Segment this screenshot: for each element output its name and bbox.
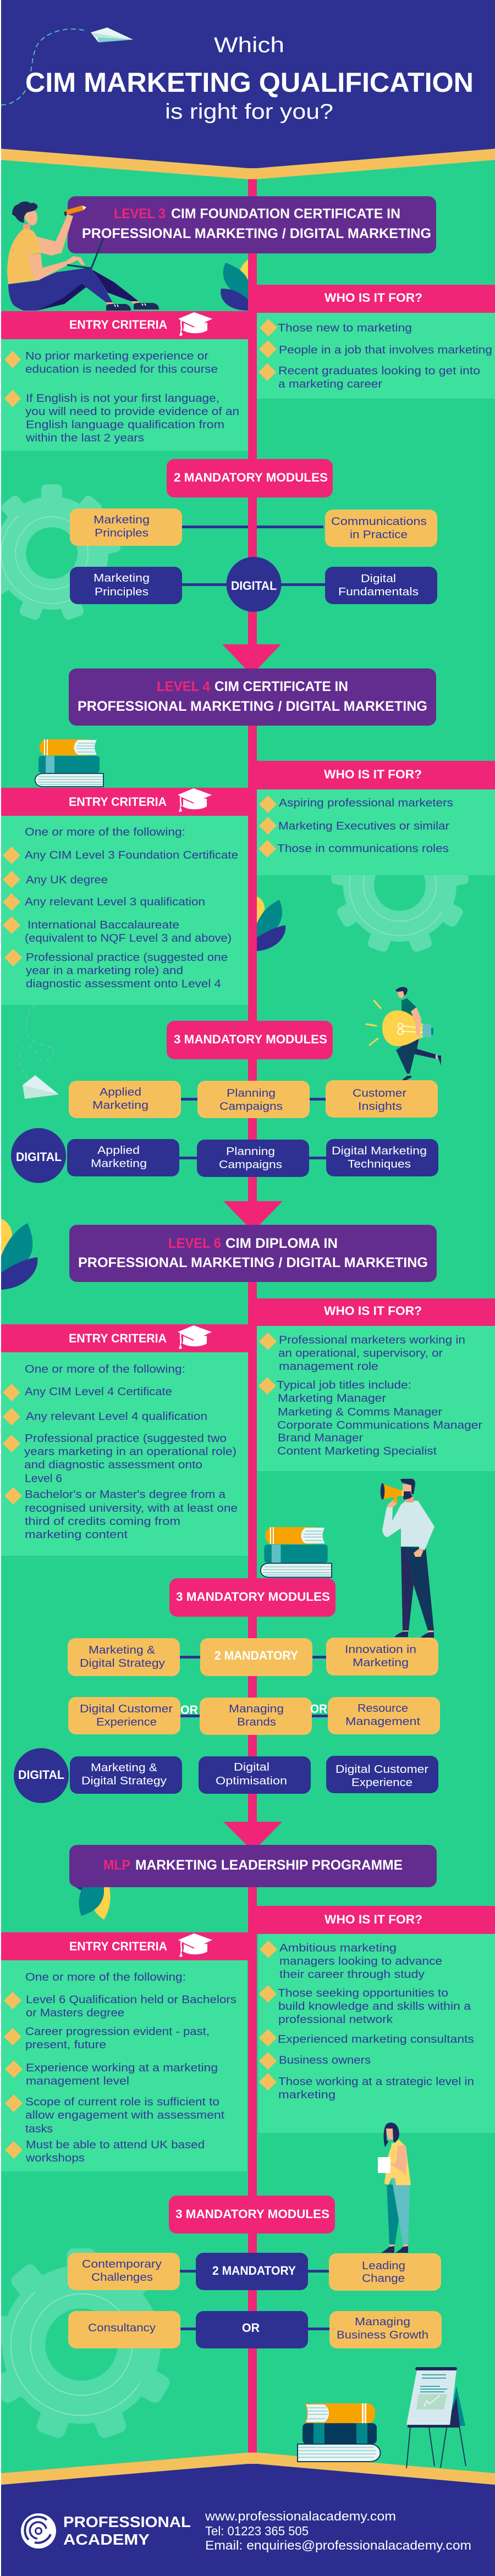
panel: entry criteria: Professional practice (suggested two (25, 1433, 227, 1445)
contact details: Email: enquiries@professionalacademy.com (205, 2538, 471, 2552)
digital module: Marketing Principles (70, 567, 182, 604)
panel: who is it for: Those in communications roles (277, 843, 449, 855)
digital oval: DIGITAL (18, 1768, 64, 1782)
panel: entry criteria: English language qualification from (26, 419, 224, 431)
module: Contemporary Challenges (68, 2253, 180, 2290)
panel: entry criteria: recognised university, with at least one (25, 1502, 238, 1514)
digital module: Digital Customer Experience: Experience (351, 1777, 413, 1789)
section: marketing leadership programme (1, 1845, 495, 2348)
icon: books (298, 2403, 381, 2462)
panel: entry criteria: or Masters degree (26, 2007, 124, 2019)
panel: entry criteria: allow engagement with assessment (25, 2109, 224, 2121)
entry criteria banner: ENTRY CRITERIA (69, 1331, 167, 1345)
module: Planning Campaigns: Planning (227, 1087, 276, 1099)
icon: flip chart (406, 2367, 466, 2468)
module: Leading Change (329, 2253, 441, 2291)
panel: who is it for: Experienced marketing consultants (278, 2033, 474, 2046)
panel: entry criteria: you will need to provide evidence of an (25, 406, 239, 418)
panel: who is it for: Brand Manager (278, 1432, 363, 1444)
digital oval: DIGITAL (231, 579, 277, 593)
panel: entry criteria: Career progression evident - past, (25, 2026, 210, 2038)
digital module: Digital Marketing Techniques: Digital Marketing (332, 1145, 427, 1157)
heading: level 4: LEVEL 4 (157, 679, 210, 694)
panel: who is it for: Content Marketing Specialist (277, 1445, 437, 1457)
module: Resource Management: Resource (358, 1702, 408, 1715)
section: level 4 (1, 668, 495, 1225)
or label left: OR (180, 1703, 198, 1717)
digital oval: DIGITAL (16, 1150, 62, 1164)
digital module: Planning Campaigns: Campaigns (219, 1159, 282, 1171)
contact details (205, 2509, 471, 2552)
panel: entry criteria (1, 339, 248, 451)
heading: level 3: LEVEL 3 (114, 206, 166, 222)
module: Contemporary Challenges: Challenges (91, 2271, 153, 2284)
panel: entry criteria: Any CIM Level 4 Certificate (25, 1386, 172, 1398)
modules heading: 3 MANDATORY MODULES (174, 1032, 327, 1046)
digital module: Marketing & Digital Strategy: Marketing & (91, 1762, 158, 1774)
heading: level 3: CIM FOUNDATION CERTIFICATE IN (171, 206, 400, 222)
module: Applied Marketing (69, 1081, 181, 1118)
dashed flight path (19, 1005, 54, 1079)
logo mark (21, 2513, 56, 2549)
digital module: Digital Marketing Techniques (326, 1139, 438, 1176)
digital oval (227, 557, 282, 612)
module: Innovation in Marketing: Marketing (353, 1657, 409, 1669)
panel: entry criteria: tasks (25, 2123, 53, 2135)
module: Marketing Principles (70, 508, 182, 546)
panel: who is it for: build knowledge and skills within a (278, 2000, 471, 2013)
illustration: man carrying light bulb (366, 987, 441, 1080)
heading: level 6: CIM DIPLOMA IN (226, 1236, 338, 1251)
panel: entry criteria: Any CIM Level 3 Foundation Certificate (25, 849, 238, 861)
section: level 6 (1, 1219, 495, 1845)
icon: leaves (221, 259, 248, 311)
who is it for banner (248, 761, 495, 789)
module: 2 mandatory: 2 MANDATORY (215, 1649, 298, 1662)
digital oval (14, 1748, 69, 1803)
module connectors (179, 526, 329, 2330)
modules heading (167, 1021, 333, 1059)
digital module: Applied Marketing: Applied (97, 1145, 140, 1157)
module: Innovation in Marketing: Innovation in (345, 1644, 416, 1656)
panel: entry criteria: If English is not your first language, (26, 393, 219, 405)
arrow (222, 644, 281, 668)
digital module: Digital Fundamentals: Digital (361, 573, 396, 585)
panel: entry criteria: Any relevant Level 4 qualification (26, 1411, 207, 1423)
module: Planning Campaigns: Campaigns (219, 1101, 283, 1113)
contact details: www.professionalacademy.com (205, 2509, 396, 2523)
module: Managing Business Growth: Business Growth (337, 2329, 428, 2341)
panel: entry criteria: No prior marketing experience or (25, 350, 208, 362)
footer banner (1, 2367, 495, 2576)
digital module: Digital Optimisation (199, 1756, 311, 1794)
panel: who is it for: Professional marketers working in (279, 1334, 465, 1346)
logo wordmark: PROFESSIONAL (63, 2513, 191, 2530)
panel: entry criteria: Bachelor's or Master's degree from a (25, 1489, 226, 1501)
module: 2 mandatory (200, 1638, 312, 1676)
arrow (223, 1201, 283, 1225)
panel: entry criteria: management level (26, 2075, 129, 2087)
logo wordmark (63, 2513, 191, 2548)
module: Managing Brands: Brands (237, 1716, 276, 1728)
panel: who is it for: Typical job titles include: (277, 1379, 411, 1391)
panel: who is it for: a marketing career (278, 378, 382, 390)
module: Resource Management (328, 1697, 440, 1734)
logo: professional academy (21, 2513, 191, 2549)
heading: MLP: MLP (103, 1858, 130, 1873)
heading: level 4: PROFESSIONAL MARKETING / DIGITAL MARKETING (78, 699, 427, 714)
module: Digital Customer Experience (68, 1697, 180, 1734)
panel: entry criteria: Level 6 (25, 1473, 62, 1485)
digital module: Digital Fundamentals (325, 567, 437, 604)
icon: paper plane (91, 27, 133, 42)
heading: level 6 (69, 1225, 437, 1282)
heading: level 3: PROFESSIONAL MARKETING / DIGITAL MARKETING (82, 226, 431, 241)
arrow (223, 1822, 282, 1845)
panel: entry criteria (1, 1960, 247, 2171)
panel: entry criteria: education is needed for this course (25, 363, 218, 375)
heading: level 6: LEVEL 6 (168, 1236, 221, 1251)
entry criteria banner (1, 1324, 257, 1352)
module: Applied Marketing: Marketing (92, 1099, 148, 1112)
digital module: Digital Optimisation: Optimisation (216, 1775, 287, 1787)
panel: who is it for: Business owners (279, 2054, 371, 2066)
contact details: Tel: 01223 365 505 (205, 2524, 309, 2538)
heading: MLP: MARKETING LEADERSHIP PROGRAMME (135, 1858, 403, 1873)
heading: level 4 (69, 668, 436, 726)
panel: entry criteria (1, 1352, 248, 1556)
digital module: Digital Customer Experience (326, 1756, 438, 1793)
entry criteria banner: ENTRY CRITERIA (69, 795, 167, 809)
digital module: Marketing & Digital Strategy (70, 1756, 182, 1794)
digital module: Digital Fundamentals: Fundamentals (338, 586, 419, 598)
heading: MLP (69, 1845, 437, 1887)
digital module: Marketing & Digital Strategy: Digital Strategy (81, 1775, 167, 1787)
module: Marketing Principles: Principles (95, 527, 148, 539)
panel: who is it for (258, 1934, 495, 2133)
panel: who is it for (257, 313, 495, 399)
panel: entry criteria: and diagnostic assessment onto (24, 1459, 202, 1471)
title: Which (214, 34, 284, 57)
panel: who is it for: marketing (278, 2089, 336, 2101)
illustration: man with laptop (7, 201, 159, 311)
digital module: Digital Customer Experience: Digital Customer (336, 1764, 428, 1776)
panel: who is it for: Recent graduates looking to get into (278, 365, 480, 377)
panel: entry criteria: International Baccalaureate (28, 919, 179, 931)
module: Applied Marketing: Applied (100, 1086, 141, 1098)
dashed flight path (1, 29, 86, 105)
module: or (196, 2311, 308, 2348)
module: Communications in Practice: Communications (331, 516, 427, 528)
panel: entry criteria (1, 816, 248, 1005)
panel: entry criteria: within the last 2 years (25, 432, 144, 444)
panel: entry criteria: Any relevant Level 3 qualification (25, 896, 205, 908)
heading: level 6: PROFESSIONAL MARKETING / DIGITAL MARKETING (78, 1255, 428, 1270)
entry criteria banner (1, 1932, 257, 1960)
digital module: Planning Campaigns: Planning (226, 1146, 275, 1158)
background gears (0, 484, 469, 2440)
panel: who is it for: People in a job that involves marketing (279, 344, 492, 356)
heading: level 3 (68, 196, 436, 253)
module: Consultancy (68, 2311, 180, 2348)
module: or: OR (242, 2321, 260, 2335)
left page edge (0, 0, 1, 2576)
digital module: Planning Campaigns (197, 1140, 309, 1177)
entry criteria banner (1, 788, 257, 816)
panel: entry criteria: years marketing in an operational role) (24, 1446, 237, 1458)
who is it for banner (257, 285, 495, 313)
modules heading (169, 1578, 336, 1617)
modules heading: 2 MANDATORY MODULES (174, 471, 328, 484)
icon: books (35, 739, 103, 787)
panel: who is it for: Ambitious marketing (279, 1942, 397, 1954)
who is it for banner: WHO IS IT FOR? (324, 1304, 422, 1318)
central pink timeline (248, 179, 257, 2455)
panel: entry criteria: workshops (25, 2152, 85, 2164)
module: Managing Brands: Managing (229, 1703, 284, 1715)
digital oval (11, 1128, 66, 1183)
module: Customer Insights (326, 1080, 438, 1118)
module: Marketing & Digital Strategy: Marketing & (89, 1644, 156, 1656)
panel: who is it for: an operational, supervisory, or (278, 1347, 443, 1359)
module: 2 mandatory (196, 2253, 308, 2290)
module: Leading Change: Change (362, 2273, 405, 2285)
modules heading (169, 2196, 335, 2234)
panel: entry criteria: Must be able to attend UK based (26, 2139, 205, 2151)
module: Managing Business Growth (329, 2311, 442, 2348)
panel: who is it for: professional network (278, 2014, 393, 2026)
module: Resource Management: Management (345, 1716, 421, 1728)
module: Planning Campaigns (197, 1081, 310, 1118)
title: CIM MARKETING QUALIFICATION (25, 67, 474, 98)
panel: who is it for: Marketing Executives or similar (278, 820, 449, 832)
panel: who is it for: management role (279, 1361, 378, 1373)
who is it for banner (248, 1906, 495, 1934)
panel: who is it for: Those seeking opportunities to (278, 1987, 448, 1999)
who is it for banner: WHO IS IT FOR? (324, 1912, 422, 1926)
panel: who is it for: Marketing Manager (278, 1392, 386, 1405)
entry criteria banner: ENTRY CRITERIA (69, 1939, 167, 1953)
panel: entry criteria: year in a marketing role) and (26, 965, 183, 977)
module: Communications in Practice (325, 510, 437, 547)
panel: who is it for (257, 1326, 495, 1471)
panel: who is it for (257, 789, 495, 875)
who is it for banner (248, 1298, 495, 1326)
panel: entry criteria: One or more of the following: (25, 826, 185, 838)
modules heading: 3 MANDATORY MODULES (176, 1590, 330, 1604)
entry criteria banner: ENTRY CRITERIA (69, 318, 167, 331)
panel: entry criteria: Experience working at a marketing (26, 2062, 218, 2074)
module: Contemporary Challenges: Contemporary (82, 2258, 162, 2270)
panel: entry criteria: marketing content (25, 1529, 128, 1541)
header banner (1, 0, 495, 179)
panel: entry criteria: (equivalent to NQF Level 3 and above) (25, 932, 232, 944)
heading: level 4: CIM CERTIFICATE IN (215, 679, 348, 694)
module: Digital Customer Experience: Digital Customer (80, 1703, 173, 1715)
panel: who is it for: Corporate Communications Manager (277, 1419, 482, 1431)
panel: entry criteria: One or more of the following: (25, 1363, 185, 1375)
module: Marketing Principles: Marketing (94, 514, 150, 526)
module: Customer Insights: Customer (353, 1087, 406, 1099)
panel: entry criteria: Scope of current role is sufficient to (25, 2096, 219, 2108)
icon: leaves (74, 1886, 111, 1920)
module: Innovation in Marketing (326, 1638, 438, 1676)
digital module: Digital Optimisation: Digital (234, 1761, 270, 1773)
icon: books (261, 1527, 332, 1577)
module: Marketing & Digital Strategy: Digital Strategy (80, 1657, 165, 1670)
panel: entry criteria: diagnostic assessment onto Level 4 (26, 978, 221, 990)
module: 2 mandatory: 2 MANDATORY (212, 2264, 296, 2278)
icon: leaves (1, 1219, 37, 1290)
logo wordmark: ACADEMY (63, 2531, 150, 2548)
digital module: Digital Marketing Techniques: Techniques (348, 1158, 411, 1170)
who is it for banner: WHO IS IT FOR? (324, 291, 422, 305)
module: Managing Brands (200, 1698, 312, 1735)
module: Digital Customer Experience: Experience (96, 1716, 157, 1728)
panel: who is it for: Marketing & Comms Manager (278, 1406, 442, 1418)
module: Marketing & Digital Strategy (68, 1638, 180, 1676)
panel: entry criteria: present, future (25, 2039, 106, 2051)
panel: entry criteria: One or more of the following: (25, 1971, 186, 1983)
panel: entry criteria: third of credits coming from (25, 1516, 180, 1528)
panel: entry criteria: Professional practice (suggested one (26, 952, 228, 964)
who is it for banner: WHO IS IT FOR? (324, 767, 422, 781)
title (25, 34, 474, 124)
module: Leading Change: Leading (362, 2260, 405, 2272)
title: is right for you? (165, 100, 333, 124)
module: Managing Business Growth: Managing (355, 2316, 410, 2328)
module: Consultancy: Consultancy (88, 2322, 156, 2334)
illustration: woman with tablet (378, 2122, 411, 2253)
panel: who is it for: Those working at a strategic level in (278, 2076, 474, 2088)
module: Communications in Practice: in Practice (350, 529, 408, 541)
entry criteria banner (1, 311, 248, 339)
panel: entry criteria: Level 6 Qualification held or Bachelors (26, 1994, 237, 2006)
illustration: man with megaphone (381, 1479, 435, 1638)
panel: entry criteria: Any UK degree (26, 874, 108, 886)
module: Customer Insights: Insights (358, 1101, 402, 1113)
digital module: Marketing Principles: Marketing (94, 572, 150, 584)
or label right: OR (310, 1702, 327, 1716)
icon: paper plane (23, 1075, 59, 1099)
modules heading: 3 MANDATORY MODULES (175, 2207, 329, 2221)
panel: who is it for: Aspiring professional marketers (279, 797, 453, 809)
section: level 3 (1, 196, 495, 668)
icon: leaves (257, 897, 285, 951)
modules heading (167, 459, 333, 497)
panel: who is it for: managers looking to advance (279, 1955, 442, 1967)
panel: who is it for: their career through study (279, 1969, 425, 1981)
digital module: Applied Marketing (67, 1139, 179, 1176)
panel: who is it for: Those new to marketing (278, 322, 412, 334)
digital module: Applied Marketing: Marketing (91, 1158, 147, 1170)
digital module: Marketing Principles: Principles (95, 586, 148, 598)
